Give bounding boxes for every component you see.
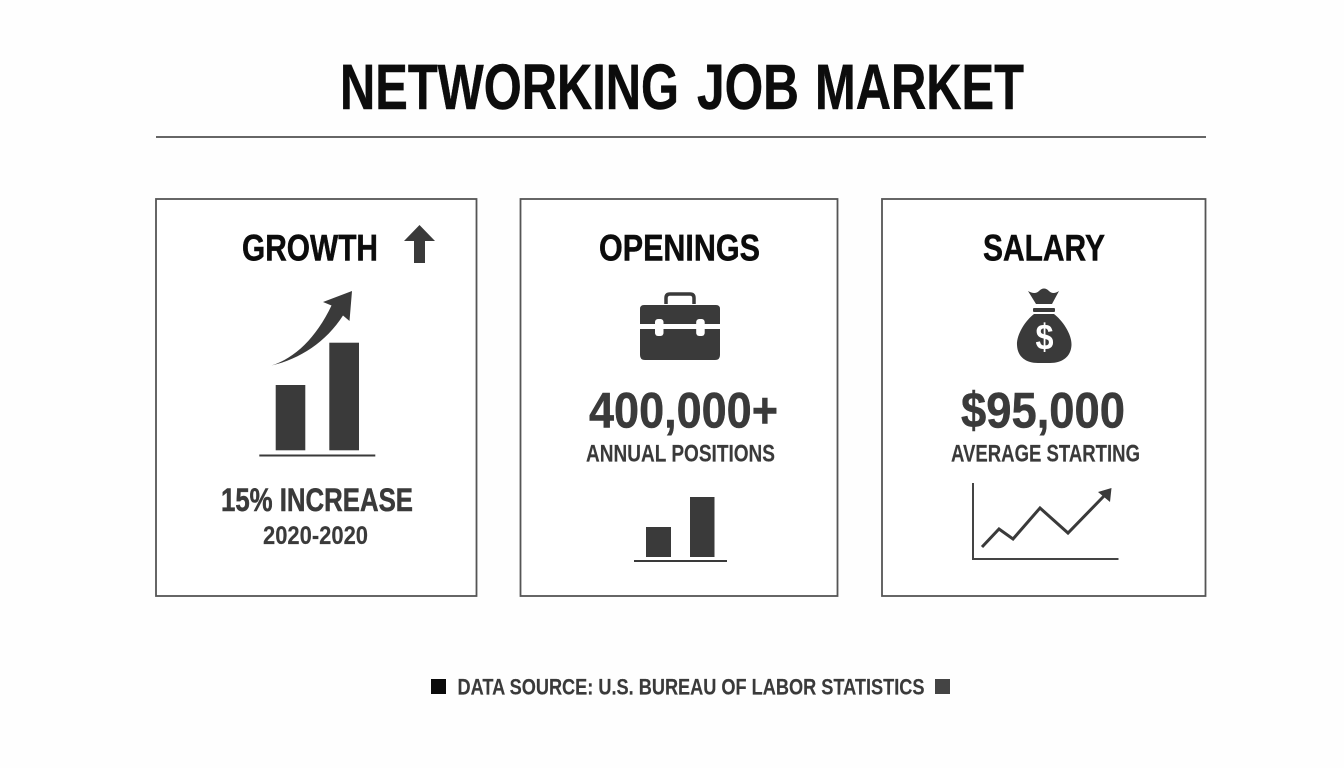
panel: growth <box>156 199 476 596</box>
title <box>340 51 1024 123</box>
icon: up arrow <box>404 225 435 263</box>
chart: small bars <box>634 497 727 562</box>
title: NETWORKING <box>340 51 679 123</box>
footer: data source: DATA SOURCE: U.S. BUREAU OF LABOR STATISTICS <box>458 674 924 700</box>
icon: money bag: $ <box>1036 316 1054 358</box>
stat: $95,000: $95,000 <box>961 382 1125 438</box>
stat label: average starting: AVERAGE STARTING <box>951 440 1140 468</box>
chart: rising bars with curved arrow <box>259 291 375 456</box>
stat label: annual positions: ANNUAL POSITIONS <box>586 440 775 468</box>
panel: openings <box>520 199 838 596</box>
title: MARKET <box>815 51 1024 123</box>
chart: salary line trend <box>973 483 1118 559</box>
heading: openings: OPENINGS <box>599 228 760 268</box>
title: JOB <box>697 51 799 123</box>
panel: salary <box>882 199 1206 596</box>
heading: salary: SALARY <box>983 228 1105 268</box>
heading: growth: GROWTH <box>242 228 378 268</box>
stat: 15% increase: 15% INCREASE <box>221 482 413 518</box>
stat label: years: 2020-2020 <box>263 522 368 550</box>
stat: 400,000+: 400,000+ <box>589 382 778 438</box>
icon: money bag <box>1017 288 1072 363</box>
icon: briefcase <box>640 294 720 360</box>
